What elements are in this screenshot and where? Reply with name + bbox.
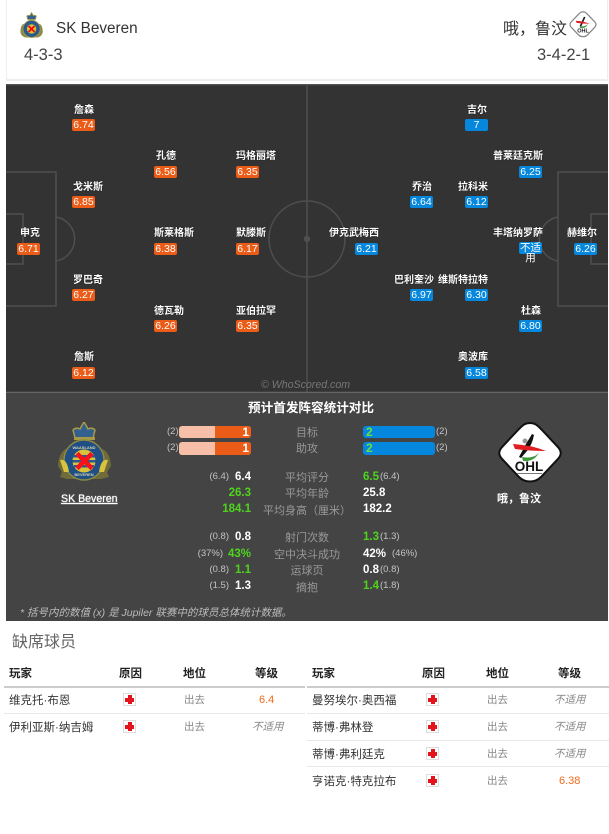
header panel: teams and formations (6, 0, 608, 81)
player: 普莱廷克斯: 6.25 (520, 166, 541, 178)
player: 默滕斯: 6.17 (237, 243, 258, 255)
player: 维斯特拉特: 维斯特拉特 (438, 275, 488, 286)
player: 普莱廷克斯: 普莱廷克斯 (493, 151, 543, 162)
table header: 地位 (486, 668, 509, 680)
away prior assists: (2) (436, 442, 448, 453)
stat: aerial duels (198, 548, 417, 561)
stat: dribbles (209, 564, 400, 577)
player: 亚伯拉罕: 6.35 (237, 320, 258, 332)
home prior goals: (2) (167, 426, 179, 437)
away players (329, 104, 597, 379)
table header: 原因 (422, 668, 445, 680)
home prior assists: (2) (167, 442, 179, 453)
stat: average rating: 6.5 (363, 471, 379, 483)
player: 吉尔 (465, 104, 488, 131)
table: home missing players (4, 667, 305, 734)
row: 亨诺克·特克拉布: 6.38 (559, 775, 580, 787)
home team link: SK Beveren (61, 493, 118, 505)
row: 蒂博·弗利廷克: 出去 (487, 748, 508, 760)
away assists bar: 2 (366, 441, 373, 455)
table header: 原因 (119, 668, 142, 680)
stat: average age: 25.8 (363, 487, 385, 499)
player: 申克: 6.71 (18, 243, 39, 255)
player: 詹森: 詹森 (74, 105, 94, 116)
pitch markings (6, 84, 608, 393)
player: 申克 (17, 226, 40, 255)
player: 赫维尔: 6.26 (575, 243, 596, 255)
icon: OHL small crest: OHL (577, 29, 589, 35)
stat: average age: 平均年龄 (285, 488, 329, 500)
player: 亚伯拉罕 (236, 304, 276, 332)
stat: shots: 射门次数 (285, 532, 329, 544)
stat: aerial duels: (46%) (392, 548, 417, 559)
row: 曼努埃尔·奥西福: 出去 (487, 694, 508, 706)
stat: dribbles: 运球页 (290, 565, 324, 577)
row: 蒂博·弗利廷克 (307, 743, 609, 768)
stat: shots: 1.3 (363, 531, 379, 543)
stat: shots: (0.8) (209, 531, 229, 542)
row: 曼努埃尔·奥西福: 曼努埃尔·奥西福 (312, 695, 396, 707)
row: 伊利亚斯·纳吉姆: 伊利亚斯·纳吉姆 (9, 722, 93, 734)
icon: OHL crest: OHL (515, 459, 543, 474)
player: 拉科米 (458, 180, 488, 208)
player: 默滕斯: 默滕斯 (236, 228, 266, 239)
player: 德瓦勒: 6.26 (155, 320, 176, 332)
player: 玛格丽塔 (236, 150, 276, 178)
stat: aerial duels: 空中决斗成功 (274, 549, 340, 561)
player: 戈米斯: 6.85 (73, 196, 94, 208)
player: 丰塔纳罗萨: 丰塔纳罗萨 (493, 228, 543, 239)
stat: average height (222, 503, 392, 517)
player: 拉科米: 6.12 (466, 196, 487, 208)
icon: OHL crest (498, 422, 562, 482)
stat: average rating: (6.4) (380, 471, 400, 482)
table header: 玩家 (312, 668, 335, 680)
stat: aerial duels: (37%) (198, 548, 223, 559)
stat: average age: 26.3 (229, 487, 251, 499)
player: 斯莱格斯: 6.38 (155, 243, 176, 255)
player: 德瓦勒 (154, 304, 184, 332)
stat: average rating: 6.4 (235, 471, 251, 483)
row: 维克托·布恩: 6.4 (259, 694, 274, 706)
row: 蒂博·弗林登: 出去 (487, 721, 508, 733)
stat: average age (229, 487, 385, 500)
player: 丰塔纳罗萨 (493, 226, 543, 264)
row: assists (167, 441, 448, 455)
table header: 玩家 (9, 668, 32, 680)
stat: aerial duels: 43% (228, 548, 251, 560)
stat: average rating: (6.4) (209, 471, 229, 482)
stat: shots (209, 531, 400, 544)
stat: average rating (209, 471, 400, 484)
row: 伊利亚斯·纳吉姆: 出去 (184, 721, 205, 733)
row: 亨诺克·特克拉布: 亨诺克·特克拉布 (312, 776, 396, 788)
player: 孔德: 6.56 (155, 166, 176, 178)
player: 詹斯 (72, 350, 95, 379)
stat: tackles: 摘抱 (296, 582, 318, 594)
home assists bar (179, 442, 251, 455)
player: 普莱廷克斯 (493, 150, 543, 178)
stats title: 预计首发阵容统计对比 (248, 401, 374, 415)
player: 斯莱格斯 (154, 226, 194, 255)
row: 维克托·布恩 (4, 689, 305, 714)
row: 亨诺克·特克拉布: 出去 (487, 775, 508, 787)
player: 赫维尔 (567, 226, 597, 255)
row: 曼努埃尔·奥西福 (307, 689, 609, 714)
team name: SK Beveren: SK Beveren (56, 20, 138, 37)
stat: dribbles: (0.8) (209, 564, 229, 575)
icon: SK Beveren crest (58, 422, 111, 481)
row: 蒂博·弗林登: 蒂博·弗林登 (312, 722, 373, 734)
stat: dribbles: 0.8 (363, 564, 379, 576)
icon: SK Beveren small crest (20, 12, 43, 38)
player: 詹森 (72, 104, 95, 131)
player: 奥波库 (458, 350, 488, 379)
row: 蒂博·弗利廷克: 不适用 (554, 748, 586, 760)
player: 乔治 (410, 180, 433, 208)
stat: average rating: 平均评分 (285, 472, 329, 484)
home players (17, 104, 276, 379)
stat: tackles: (1.8) (380, 580, 400, 591)
player: 乔治: 6.64 (411, 196, 432, 208)
player: 吉尔: 7 (474, 119, 479, 131)
player: 詹斯: 6.12 (73, 367, 94, 379)
table header (4, 666, 305, 688)
stat: shots: (1.3) (380, 531, 400, 542)
player: 罗巴奇: 6.27 (73, 289, 94, 301)
player: 拉科米: 拉科米 (458, 182, 488, 193)
player: 斯莱格斯: 斯莱格斯 (154, 228, 194, 239)
player: 戈米斯: 戈米斯 (73, 182, 103, 193)
player: 丰塔纳罗萨: 不适 (520, 242, 541, 254)
stat: tackles: 1.4 (363, 580, 379, 592)
panel: predicted lineup stats (6, 393, 608, 621)
table header: 地位 (183, 668, 206, 680)
label: assists: 助攻 (296, 443, 318, 455)
away team name: 哦，鲁汶 (497, 493, 541, 505)
row: 伊利亚斯·纳吉姆: 不适用 (252, 721, 284, 733)
player: 伊克武梅西: 伊克武梅西 (329, 228, 379, 239)
player: 维斯特拉特 (438, 274, 488, 301)
player: 戈米斯 (72, 180, 103, 208)
table header: 等级 (558, 668, 581, 680)
away assists bar (363, 442, 435, 455)
icon: SK Beveren crest: WAASLAND (72, 445, 96, 450)
row: 蒂博·弗林登 (307, 716, 609, 741)
player: 巴利奎沙: 6.97 (411, 289, 432, 301)
player: 乔治: 乔治 (412, 182, 432, 193)
player: 奥波库: 奥波库 (458, 352, 488, 363)
icon: OHL small crest (569, 11, 597, 38)
icon: SK Beveren crest: BEVEREN (74, 472, 94, 477)
player: 玛格丽塔: 玛格丽塔 (236, 151, 276, 162)
player: 杜森: 6.80 (520, 320, 541, 332)
player: 维斯特拉特: 6.30 (466, 289, 487, 301)
formation: away: 3-4-2-1 (537, 46, 590, 64)
player: 孔德 (154, 150, 177, 178)
player: 罗巴奇 (72, 274, 103, 301)
stat: shots: 0.8 (235, 531, 251, 543)
stat: tackles: (1.5) (209, 580, 229, 591)
player: 杜森 (519, 304, 542, 332)
player: 罗巴奇: 罗巴奇 (73, 275, 103, 286)
table header: 等级 (255, 668, 278, 680)
watermark: © WhoScored.com (261, 379, 350, 391)
table header (307, 666, 609, 688)
player: 伊克武梅西 (329, 226, 379, 255)
team name: away: 哦，鲁汶 (503, 21, 567, 38)
away prior goals: (2) (436, 426, 448, 437)
player: 孔德: 孔德 (156, 151, 176, 162)
home goals bar (179, 426, 251, 438)
player: 玛格丽塔: 6.35 (237, 166, 258, 178)
stat: dribbles: 1.1 (235, 564, 251, 576)
formation: home: 4-3-3 (24, 46, 63, 64)
footnote: * 括号内的数值 (x) 是 Jupiler 联赛中的球员总体统计数据。 (20, 607, 292, 619)
stat: tackles (209, 580, 400, 594)
stat: average height: 184.1 (222, 503, 251, 515)
stat rows (198, 471, 417, 594)
row: 蒂博·弗利廷克: 蒂博·弗利廷克 (312, 749, 385, 761)
stat: tackles: 1.3 (235, 580, 251, 592)
table: away missing players (307, 660, 609, 795)
player: 默滕斯 (236, 227, 266, 255)
row: 蒂博·弗林登: 不适用 (554, 721, 586, 733)
player: 德瓦勒: 德瓦勒 (154, 306, 184, 317)
row: 伊利亚斯·纳吉姆 (4, 716, 305, 741)
player: 詹森: 6.74 (73, 119, 94, 131)
away goals bar: 2 (366, 425, 373, 439)
row: 维克托·布恩: 维克托·布恩 (9, 695, 70, 707)
player: 申克: 申克 (20, 228, 40, 239)
row: goals (167, 425, 448, 439)
player: 巴利奎沙 (394, 274, 434, 301)
stat: average height: 平均身高（厘米） (263, 505, 351, 517)
label: goals: 目标 (296, 427, 318, 439)
player: 奥波库: 6.58 (466, 367, 487, 379)
stat: aerial duels: 42% (363, 548, 386, 560)
row: 维克托·布恩: 出去 (184, 694, 205, 706)
player: 吉尔: 吉尔 (467, 105, 487, 116)
away goals bar (363, 426, 435, 438)
player: 亚伯拉罕: 亚伯拉罕 (236, 306, 276, 317)
row: 亨诺克·特克拉布 (307, 770, 609, 795)
player: 詹斯: 詹斯 (74, 352, 94, 363)
panel: pitch (6, 84, 608, 393)
player: 赫维尔: 赫维尔 (567, 228, 597, 239)
row: 曼努埃尔·奥西福: 不适用 (554, 694, 586, 706)
player: 伊克武梅西: 6.21 (356, 243, 377, 255)
heading: missing players: 缺席球员 (12, 634, 76, 651)
stat: dribbles: (0.8) (380, 564, 400, 575)
player: 杜森: 杜森 (521, 306, 541, 317)
player: 巴利奎沙: 巴利奎沙 (394, 275, 434, 286)
player: 丰塔纳罗萨: 用 (525, 252, 536, 264)
stat: average height: 182.2 (363, 503, 392, 515)
